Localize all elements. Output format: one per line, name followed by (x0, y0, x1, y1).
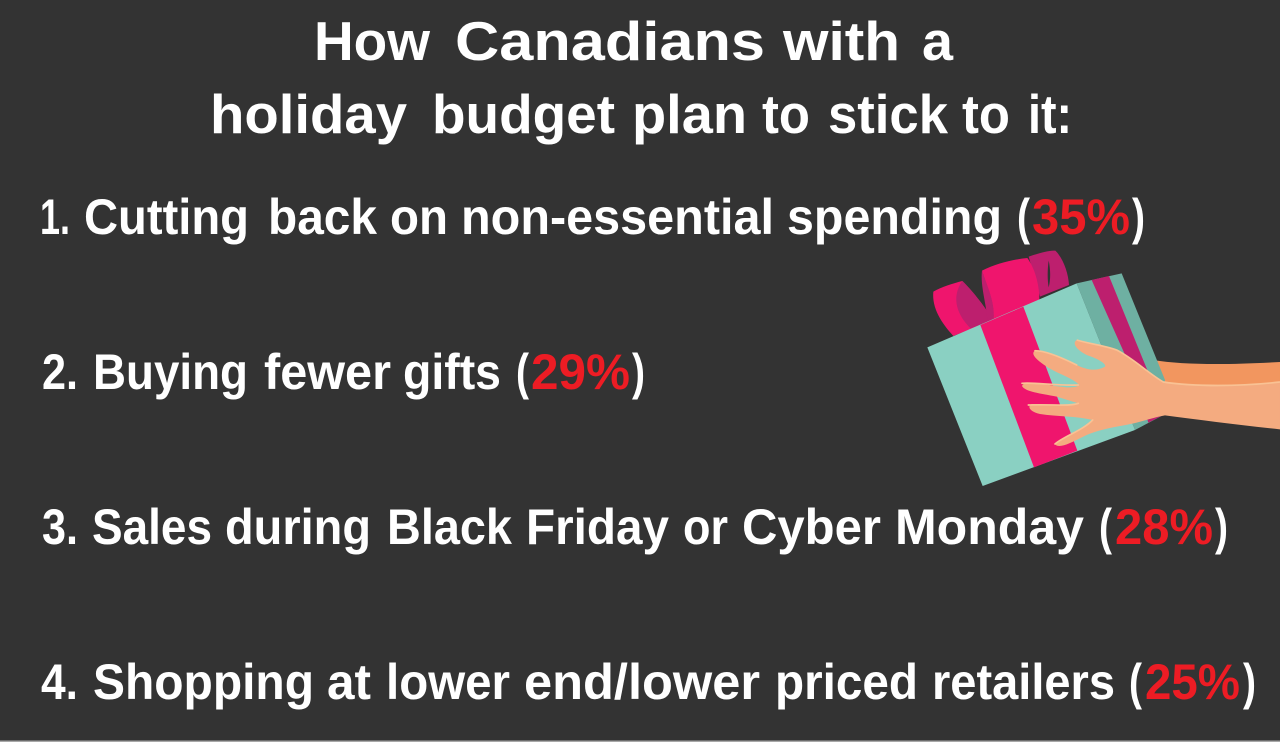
list item 1: ( (1017, 189, 1030, 245)
list item 4: lower (386, 654, 510, 710)
list item 3: Black (387, 499, 512, 555)
list item 2: 29% (531, 344, 630, 400)
list item 2: 2. (42, 344, 78, 400)
list item 4: end/lower (524, 654, 760, 710)
list item 2: ) (632, 344, 645, 400)
list item 4: retailers (932, 654, 1115, 710)
front hand and arm (1022, 340, 1280, 446)
ribbon bow (933, 251, 1069, 336)
title: with (782, 10, 900, 72)
list item 1: ) (1132, 189, 1145, 245)
list item 2: Buying (93, 344, 248, 400)
list item 2: ( (516, 344, 529, 400)
list item 3: 28% (1115, 499, 1213, 555)
title: to (962, 83, 1010, 145)
list item 1 (40, 189, 1145, 245)
list item 3: during (225, 499, 371, 555)
title: Canadians (455, 10, 765, 72)
gift box front (927, 283, 1135, 486)
title: stick (828, 83, 948, 145)
list item 3: ) (1215, 499, 1228, 555)
back arm (1153, 360, 1280, 387)
list item 4: ( (1129, 654, 1142, 710)
gift box side (1077, 273, 1165, 430)
list item 3: Cyber (742, 499, 881, 555)
list item 2 (42, 344, 645, 400)
list item 3: or (683, 499, 728, 555)
list item 3 (42, 499, 1228, 555)
list item 4: 25% (1145, 654, 1240, 710)
list item 4: 4. (41, 654, 78, 710)
list item 3: Monday (895, 499, 1084, 555)
list item 3: 3. (42, 499, 78, 555)
title: How (314, 10, 430, 72)
icon: hand holding gift box (927, 251, 1280, 486)
list item 1: Cutting (84, 189, 249, 245)
list item 4: priced (775, 654, 918, 710)
title (210, 10, 1072, 145)
list item 3: Friday (526, 499, 669, 555)
title: holiday (210, 83, 407, 145)
list item 4: Shopping (93, 654, 314, 710)
list item 3: Sales (92, 499, 212, 555)
list item 1: non-essential (461, 189, 774, 245)
list item 1: on (390, 189, 448, 245)
list item 4: ) (1243, 654, 1256, 710)
list item 4: at (327, 654, 371, 710)
list item 2: fewer (264, 344, 391, 400)
title: it: (1028, 83, 1072, 145)
list item 1: spending (787, 189, 1002, 245)
title: budget (432, 83, 615, 145)
list item 1: back (268, 189, 377, 245)
list item 2: gifts (403, 344, 501, 400)
title: plan (632, 83, 747, 145)
list item 4 (41, 654, 1256, 710)
list item 1: 35% (1032, 189, 1130, 245)
list item 1: 1. (40, 189, 70, 245)
title: a (922, 10, 953, 72)
title: to (762, 83, 810, 145)
list item 3: ( (1099, 499, 1112, 555)
